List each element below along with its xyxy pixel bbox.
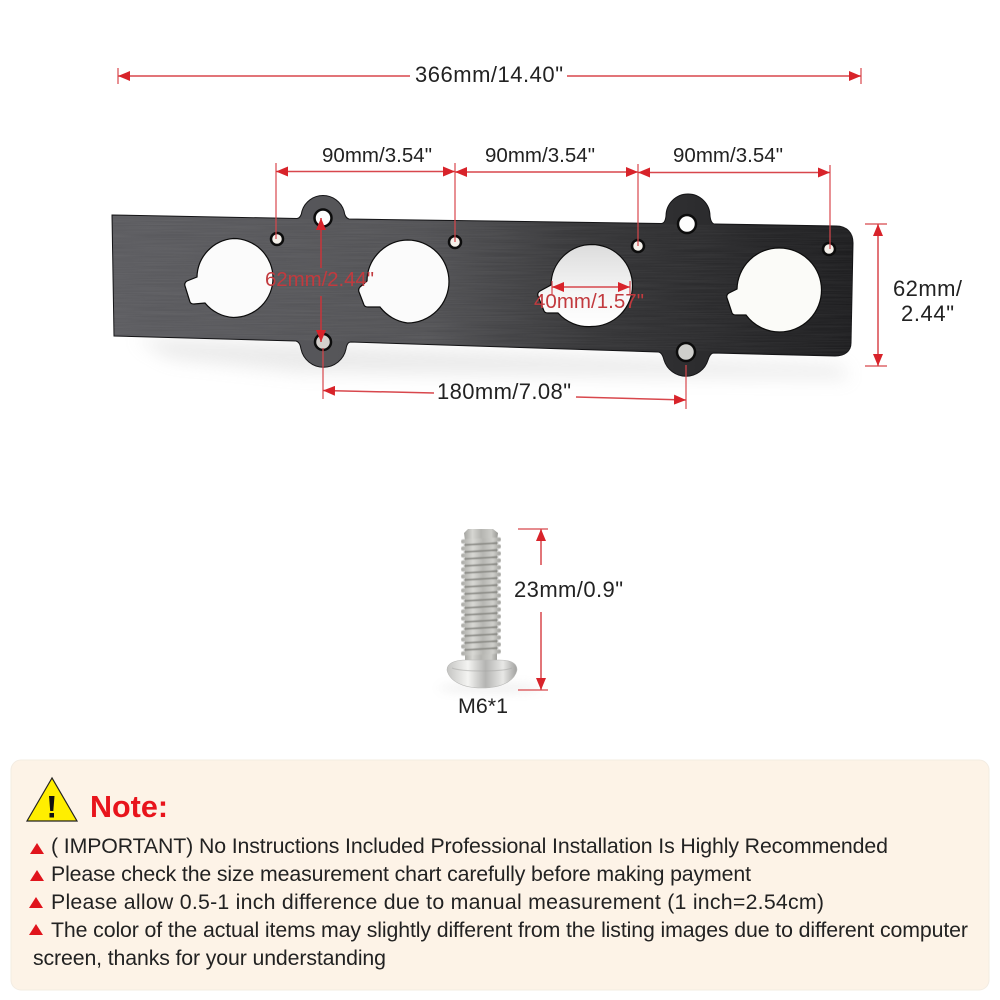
dimension: plate height 62mm: 62mm/ <box>893 276 963 301</box>
bolt head <box>447 660 517 688</box>
note item 1: ( IMPORTANT) No Instructions Included Professional Installation Is Highly Recommended <box>51 834 888 858</box>
small bolt holes <box>271 210 835 361</box>
dimension: hole diameter 40mm overlay: 40mm/1.57" <box>534 290 644 313</box>
dimension: hole spacing 90mm, second: 90mm/3.54" <box>485 144 595 167</box>
bolt size label: M6*1 <box>458 694 508 718</box>
bolt threads <box>463 540 499 654</box>
dimension: bolt length 23mm: 23mm/0.9" <box>514 577 623 602</box>
plate shadow <box>135 338 850 378</box>
big hole 4 <box>727 248 822 332</box>
note item 2: Please check the size measurement chart carefully before making payment <box>51 862 751 886</box>
note item 4: screen, thanks for your understanding <box>33 946 386 970</box>
note item 3: Please allow 0.5-1 inch difference due to manual measurement (1 inch=2.54cm) <box>51 890 824 914</box>
dimension: overall length 366mm: 366mm/14.40" <box>415 62 563 87</box>
icon: warning triangle <box>27 778 77 821</box>
bolt M6 <box>438 529 542 692</box>
dimension: bolt length 23mm <box>514 529 623 690</box>
note heading: Note: <box>90 790 168 824</box>
dimension: hole spacing 90mm, first: 90mm/3.54" <box>322 144 432 167</box>
bolt shaft <box>464 529 498 662</box>
big hole 2 <box>359 240 449 323</box>
dimension: lug spacing 180mm: 180mm/7.08" <box>437 379 571 404</box>
brushed texture <box>113 216 852 355</box>
dimension: plate height 62mm: 2.44" <box>901 301 954 326</box>
dimension: plate height 62mm <box>865 224 963 366</box>
note item 4 <box>29 918 968 970</box>
dimension: plate lug spacing 62mm overlay <box>265 218 374 342</box>
dimension: plate lug spacing 62mm overlay: 62mm/2.44" <box>265 268 374 291</box>
panel: note <box>11 760 989 990</box>
dimension: overall length 366mm <box>118 62 861 87</box>
dimension: hole spacing 90mm, third: 90mm/3.54" <box>673 144 783 167</box>
big hole 1 <box>185 238 273 318</box>
note item 4: The color of the actual items may slightly different from the listing images due to different computer <box>51 918 968 942</box>
dimension: hole spacing 90mm, third <box>638 144 830 249</box>
engine plate with holes <box>112 194 853 376</box>
dimension: lug spacing 180mm <box>323 348 686 409</box>
big hole 3 <box>538 244 632 327</box>
